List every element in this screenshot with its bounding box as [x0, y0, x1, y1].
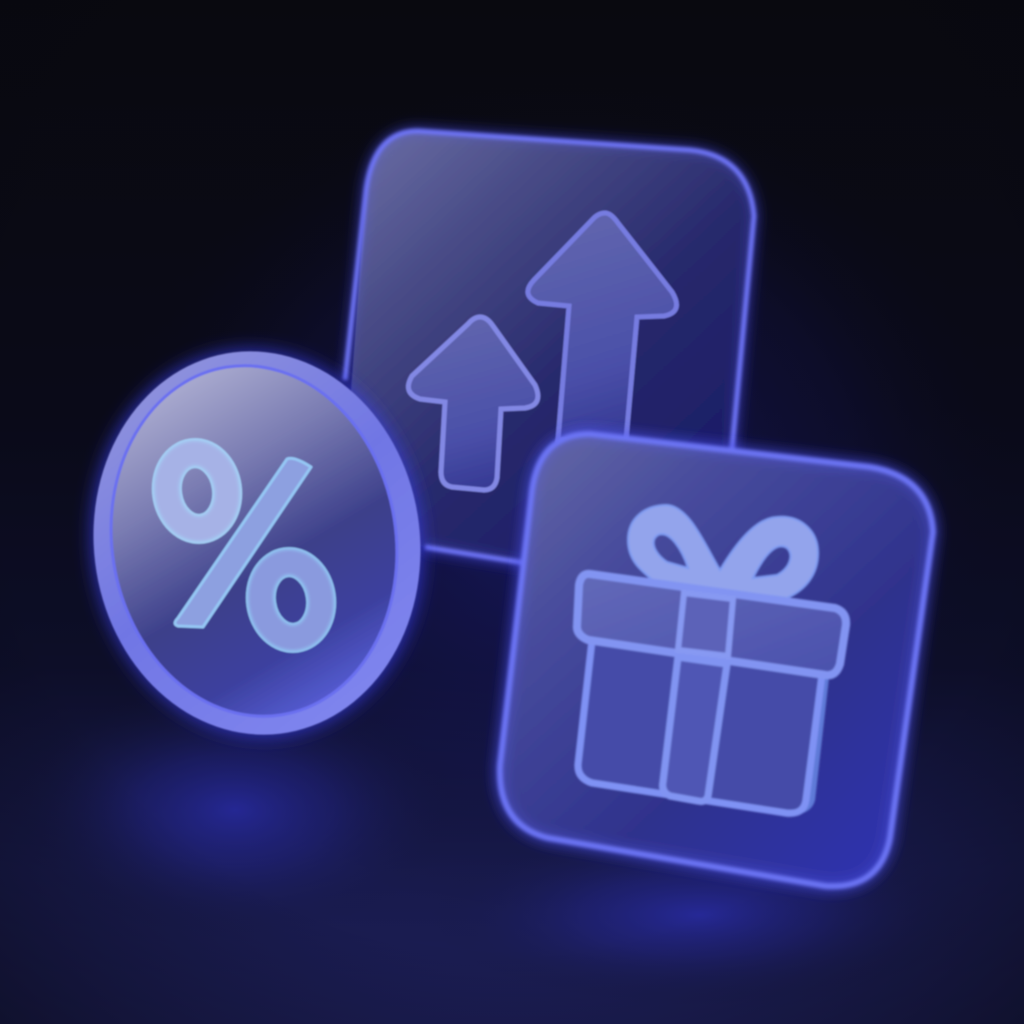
coin face	[86, 345, 422, 737]
coin glow	[67, 328, 447, 758]
icon: percent coin	[67, 328, 447, 758]
gift side depth	[798, 675, 829, 814]
icon: tall arrow	[528, 213, 676, 440]
gift box body	[578, 640, 822, 813]
coin outer rim	[72, 333, 442, 753]
percent sign	[162, 449, 326, 642]
icon: short arrow	[408, 317, 538, 490]
gift bow	[628, 505, 818, 598]
panel: rising arrows card	[345, 131, 754, 563]
ribbon vertical	[663, 657, 727, 801]
gift box icon	[577, 505, 846, 814]
ribbon on lid	[678, 593, 733, 656]
panel: gift card	[500, 434, 933, 886]
gift lid	[577, 574, 846, 675]
